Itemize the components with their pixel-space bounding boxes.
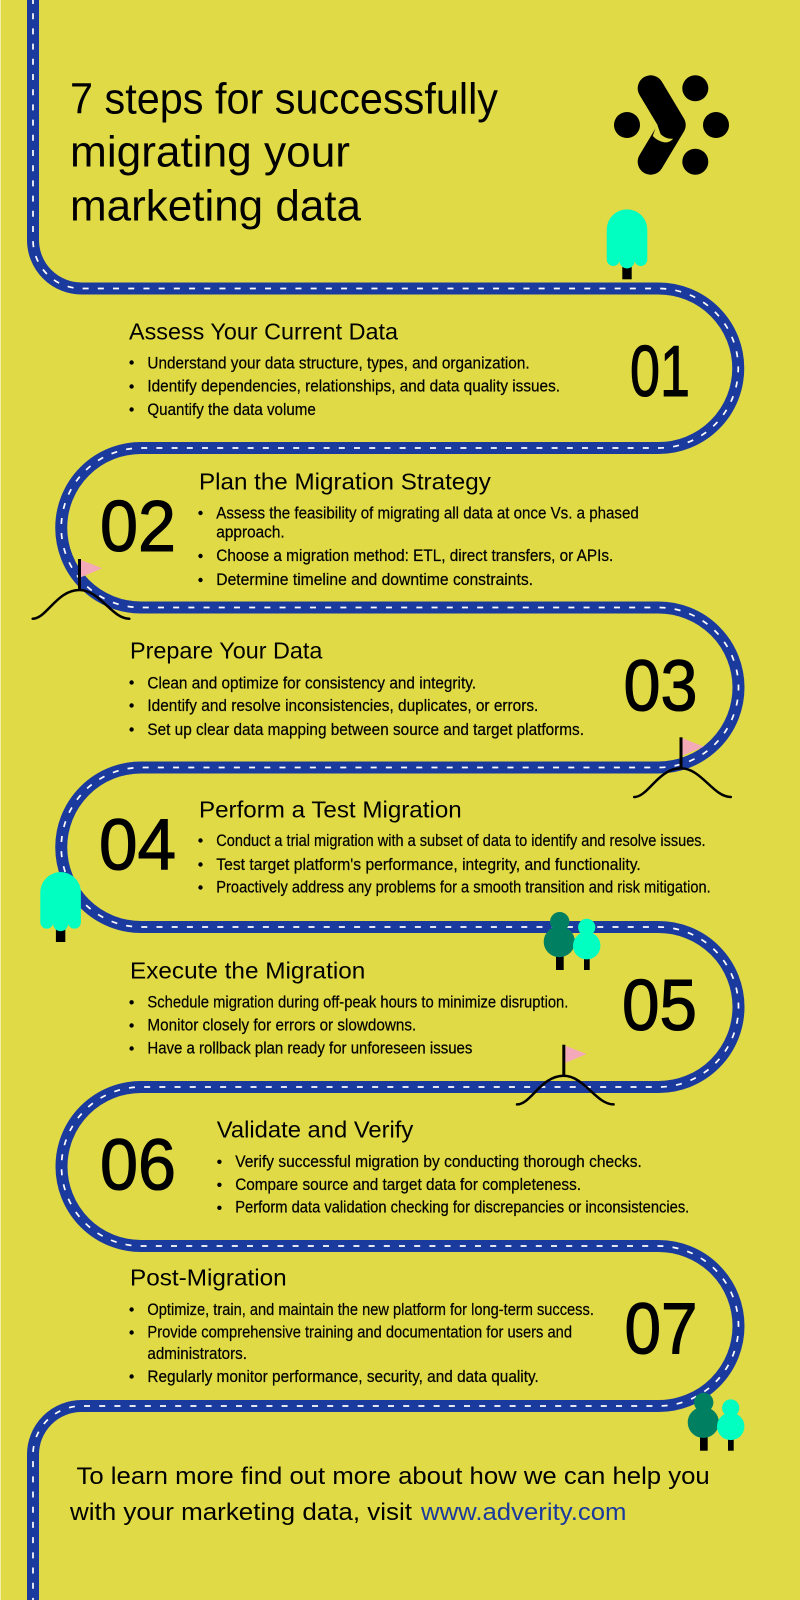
flag 3 <box>517 1045 614 1104</box>
flag 1 <box>33 559 129 619</box>
footer call to action <box>69 1463 710 1526</box>
step 1 list: Understand your data structure, types, and organization. <box>147 354 530 372</box>
title <box>70 74 498 231</box>
step 6 number: 06 <box>100 1126 176 1206</box>
step 1 heading: Assess Your Current Data <box>129 318 398 344</box>
step 5 list <box>129 994 568 1058</box>
step 6 list: Verify successful migration by conducting thorough checks. <box>235 1153 642 1171</box>
icon: tree left <box>40 872 81 942</box>
step 6 list: Perform data validation checking for discrepancies or inconsistencies. <box>235 1199 689 1217</box>
step 6 list <box>217 1153 689 1217</box>
step 3 list: Clean and optimize for consistency and integrity. <box>147 674 476 692</box>
step 7 heading: Post-Migration <box>130 1264 287 1290</box>
step 7 <box>129 1264 697 1386</box>
step 3 heading: Prepare Your Data <box>130 637 323 663</box>
icon: tree pair 2 <box>688 1393 744 1451</box>
step 4 list: Test target platform's performance, integrity, and functionality. <box>216 856 641 874</box>
step 4 list: Proactively address any problems for a smooth transition and risk mitigation. <box>216 879 711 897</box>
step 6 <box>100 1116 689 1217</box>
icon: adverity logo <box>614 75 729 175</box>
flag 2 <box>634 737 731 797</box>
step 4 list <box>198 832 711 897</box>
icon: tree pair 1 <box>544 912 600 970</box>
step 3 list: Identify and resolve inconsistencies, duplicates, or errors. <box>147 697 538 715</box>
step 7 list <box>129 1301 594 1386</box>
step 5 <box>129 957 697 1058</box>
step 4 <box>99 797 711 897</box>
step 3 list <box>129 674 584 739</box>
step 2 <box>100 468 639 589</box>
step 5 list: Have a rollback plan ready for unforeseen issues <box>147 1040 472 1058</box>
step 2 list: approach. <box>216 524 285 542</box>
step 2 heading: Plan the Migration Strategy <box>199 468 491 494</box>
step 2 list: Assess the feasibility of migrating all data at once Vs. a phased <box>216 504 639 522</box>
step 7 list: Regularly monitor performance, security, and data quality. <box>147 1368 539 1386</box>
step 3 number: 03 <box>624 646 698 726</box>
title: marketing data <box>70 182 362 231</box>
step 2 list: Determine timeline and downtime constraints. <box>216 571 533 589</box>
step 1 <box>129 318 690 419</box>
step 1 list: Identify dependencies, relationships, and data quality issues. <box>147 378 560 396</box>
step 4 list: Conduct a trial migration with a subset of data to identify and resolve issues. <box>216 832 706 850</box>
title: 7 steps for successfully <box>70 74 498 123</box>
step 2 list <box>198 504 639 589</box>
step 6 list: Compare source and target data for completeness. <box>235 1176 581 1194</box>
step 7 number: 07 <box>624 1290 698 1370</box>
step 5 list: Monitor closely for errors or slowdowns. <box>147 1017 416 1035</box>
footer call to action: www.adverity.com <box>420 1499 626 1526</box>
step 7 list: administrators. <box>147 1345 247 1363</box>
step 3 <box>129 637 697 739</box>
footer call to action: with your marketing data, visit <box>69 1499 412 1526</box>
icon: tree top <box>607 209 647 279</box>
step 1 number: 01 <box>630 332 690 412</box>
step 7 list: Provide comprehensive training and documentation for users and <box>147 1324 572 1342</box>
footer call to action: To learn more find out more about how we can help you <box>76 1463 710 1490</box>
step 5 number: 05 <box>622 966 697 1046</box>
title: migrating your <box>70 128 350 177</box>
step 2 list: Choose a migration method: ETL, direct transfers, or APIs. <box>216 547 613 565</box>
step 6 heading: Validate and Verify <box>217 1116 414 1142</box>
step 4 heading: Perform a Test Migration <box>199 797 462 823</box>
step 7 list: Optimize, train, and maintain the new platform for long-term success. <box>147 1301 594 1319</box>
step 3 list: Set up clear data mapping between source and target platforms. <box>147 721 584 739</box>
step 5 heading: Execute the Migration <box>130 957 365 983</box>
step 5 list: Schedule migration during off-peak hours to minimize disruption. <box>147 994 568 1012</box>
step 1 list <box>129 354 560 419</box>
step 1 list: Quantify the data volume <box>147 401 316 419</box>
step 4 number: 04 <box>99 806 176 886</box>
step 2 number: 02 <box>100 487 176 567</box>
